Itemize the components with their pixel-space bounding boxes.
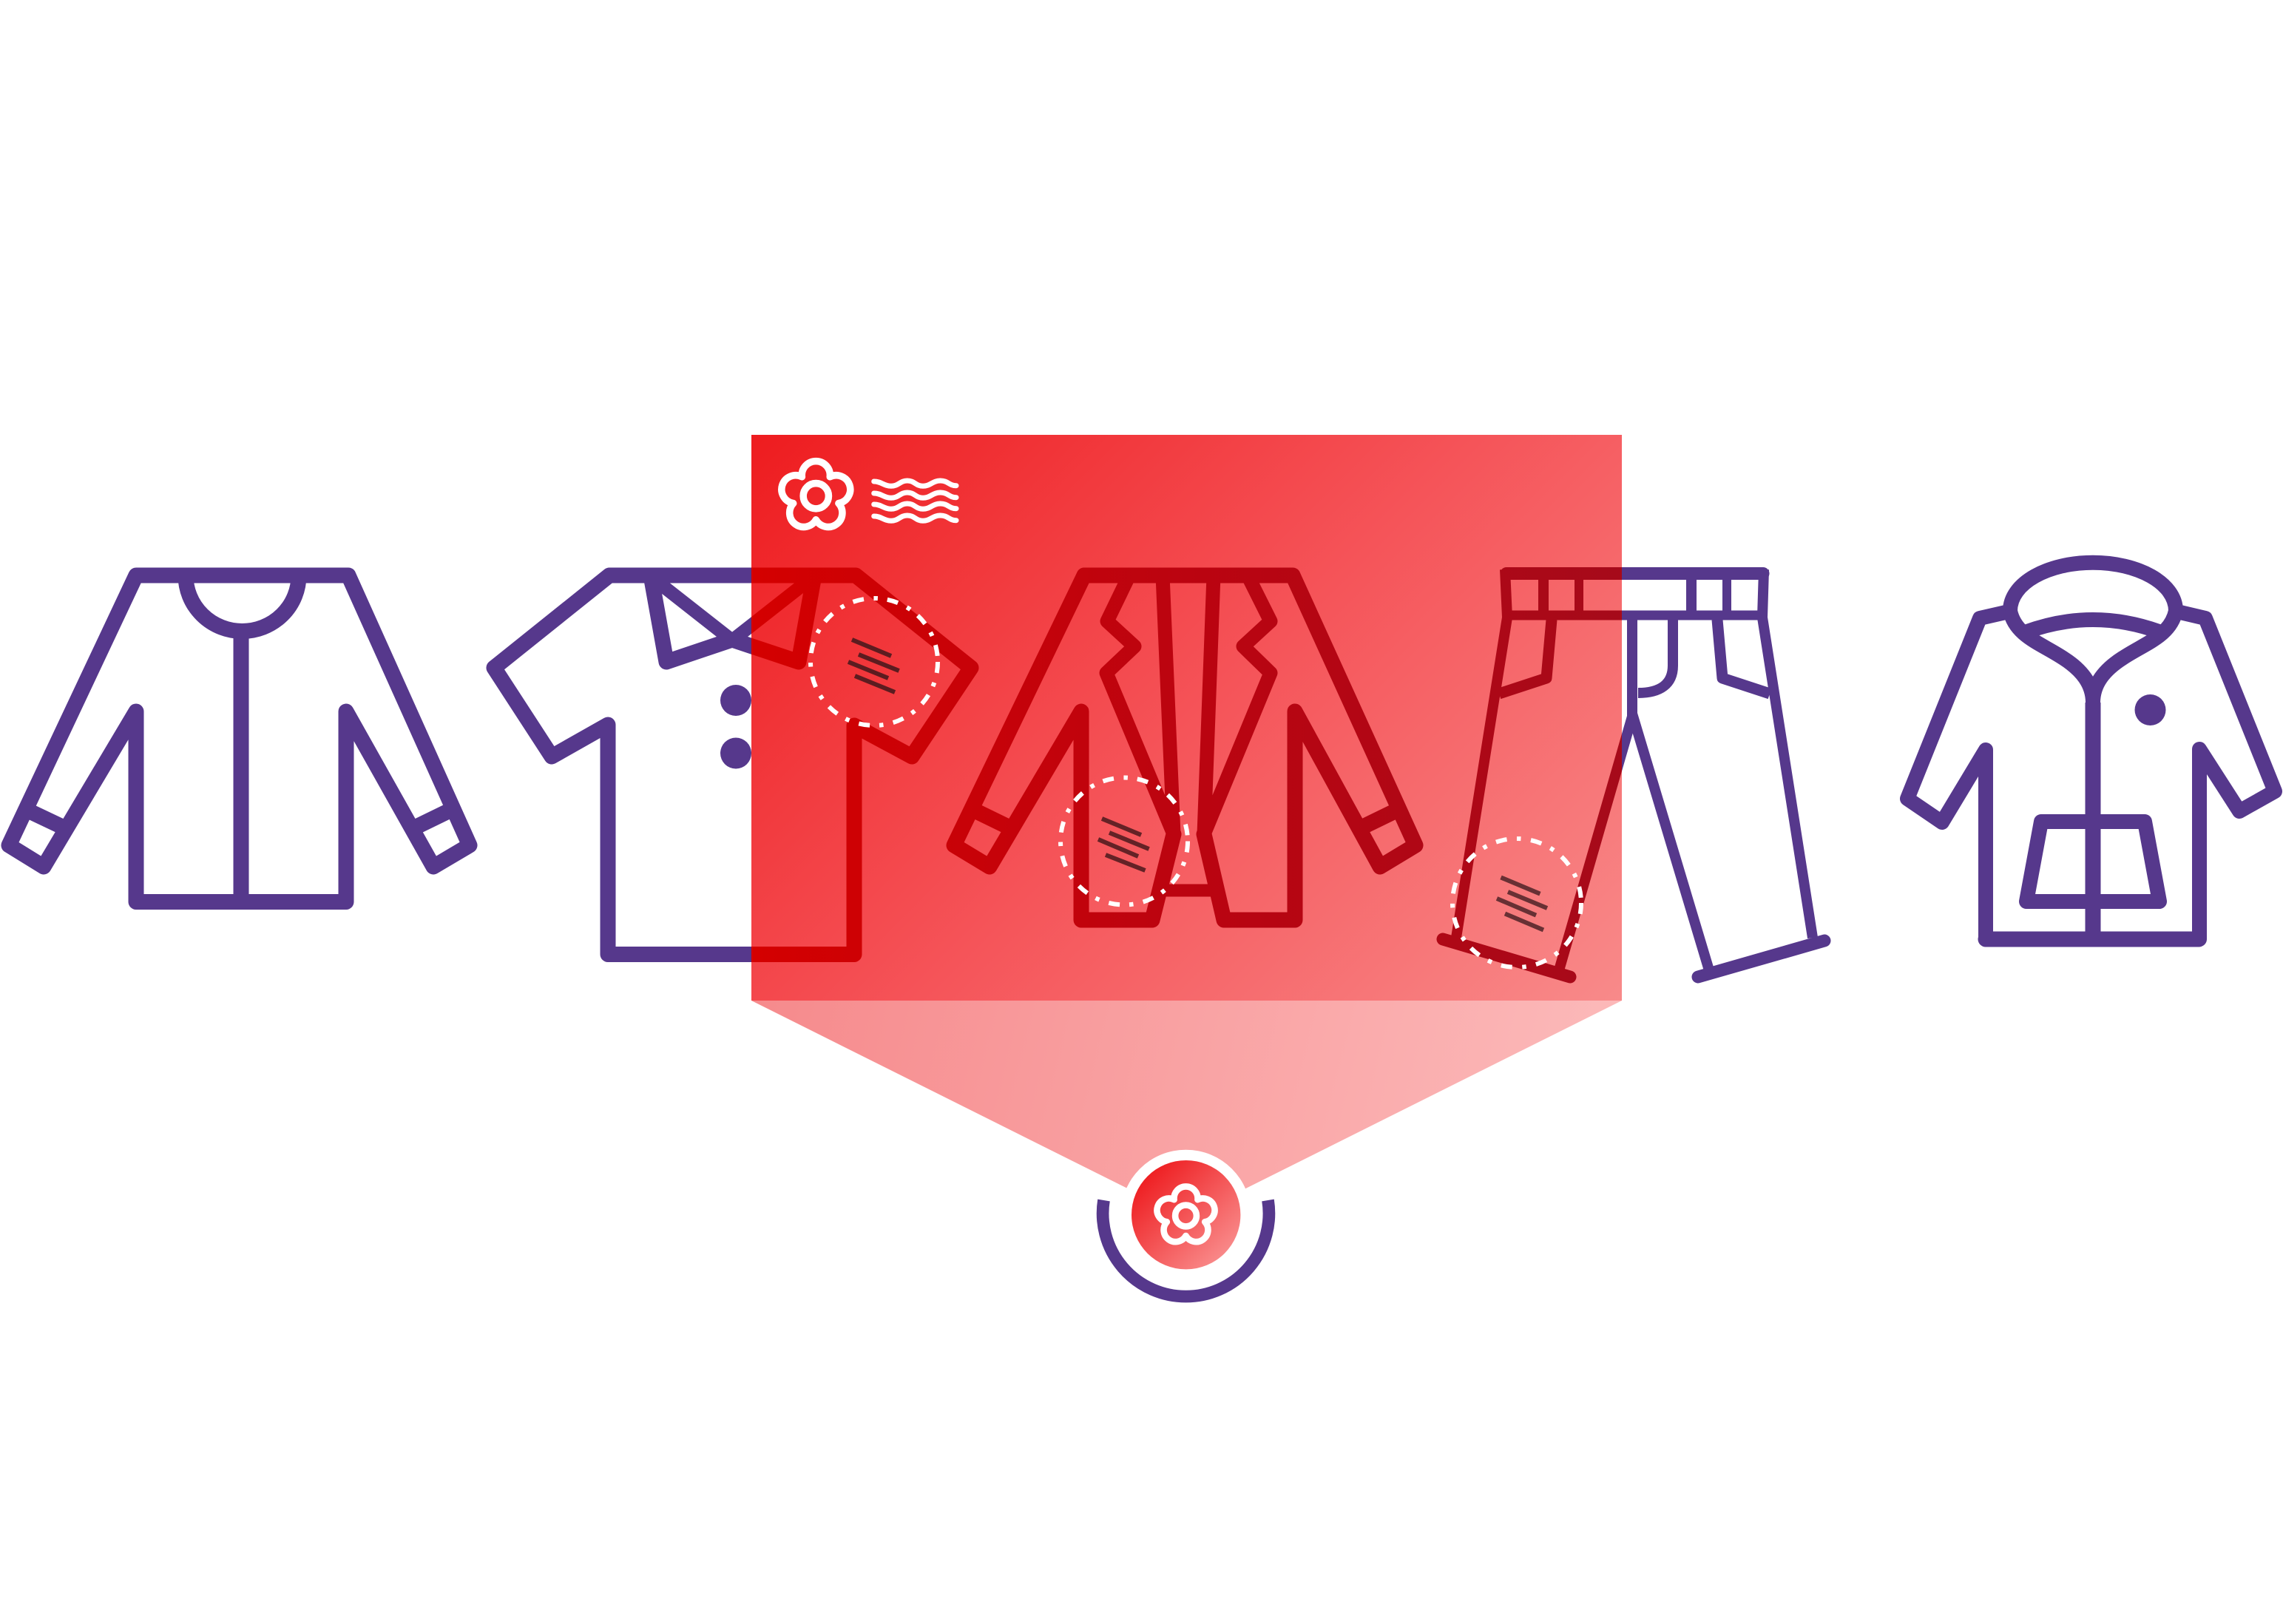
funnel: light red trapezoid leading to the badge bbox=[751, 1001, 1622, 1218]
icon: polo shirt bbox=[494, 575, 971, 954]
badge: flower in gradient circle with purple arc bbox=[1103, 1150, 1269, 1296]
icon: trousers bbox=[1443, 569, 1824, 977]
callout: dashed stain circle on shirt bbox=[811, 598, 938, 725]
callout: dashed stain circle on trousers bbox=[1452, 839, 1581, 967]
icon: suit jacket bbox=[954, 575, 1416, 920]
icon: scent waves bbox=[874, 481, 956, 521]
icon: hooded coat bbox=[1907, 563, 2275, 939]
icon: jacket bbox=[9, 575, 470, 902]
icon: flower in panel bbox=[782, 461, 850, 527]
panel: red gradient highlight bbox=[751, 435, 1622, 1001]
callout: dashed stain circle on suit bbox=[1061, 778, 1188, 905]
